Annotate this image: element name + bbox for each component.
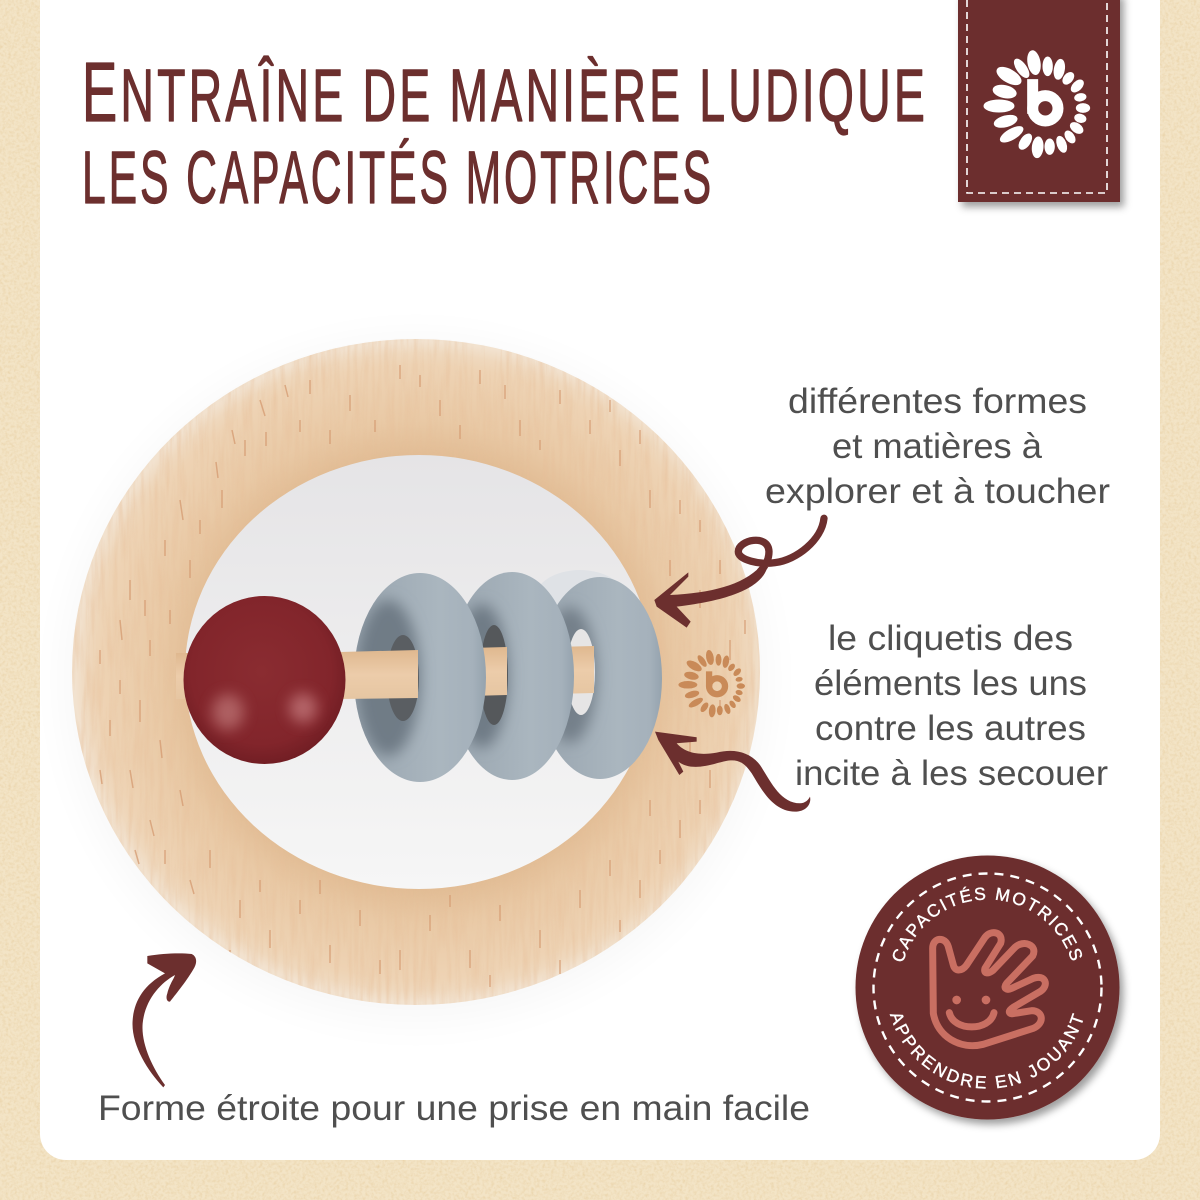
red wooden ball	[184, 596, 346, 764]
wooden ring	[60, 330, 770, 1020]
grey ring 3	[556, 577, 662, 779]
text: shape: Forme étroite pour une prise en main facile	[98, 1089, 810, 1128]
brand tag with logo	[958, 0, 1120, 202]
title: LES CAPACITÉS MOTRICES	[82, 136, 714, 219]
stick segment through ring 2	[470, 647, 507, 696]
badge text top: CAPACITÉS MOTRICES	[892, 886, 1082, 962]
text: materials: différentes formes	[788, 382, 1087, 421]
text: sound: contre les autres	[815, 709, 1086, 748]
stick segment through ring 3	[555, 646, 594, 694]
grey ring 1	[354, 573, 486, 782]
text: sound: incite à les secouer	[795, 754, 1108, 793]
title	[82, 45, 928, 219]
icon: brand flower logo	[984, 50, 1090, 158]
arrow: to shape	[132, 953, 196, 1087]
text: sound: le cliquetis des	[828, 619, 1073, 658]
badge: motor skills	[854, 856, 1128, 1130]
ring shadow	[66, 340, 766, 1020]
text: materials: explorer et à toucher	[765, 472, 1110, 511]
grey ring reflection	[534, 570, 626, 630]
badge text bottom: APPRENDRE EN JOUANT	[890, 1013, 1083, 1089]
text: sound: éléments les uns	[814, 664, 1087, 703]
grey ring 2	[467, 572, 574, 780]
icon: burned logo on wood	[678, 649, 745, 718]
stick segment visible in front	[176, 650, 418, 699]
arrow: to materials	[654, 518, 824, 628]
centre opening	[183, 453, 655, 891]
text: materials	[765, 382, 1110, 511]
arrow: to sound	[655, 732, 810, 812]
rattle toy photo	[60, 330, 770, 1020]
text: materials: et matières à	[832, 427, 1043, 466]
icon: smiling hand	[933, 933, 1045, 1046]
text: sound	[795, 619, 1108, 793]
